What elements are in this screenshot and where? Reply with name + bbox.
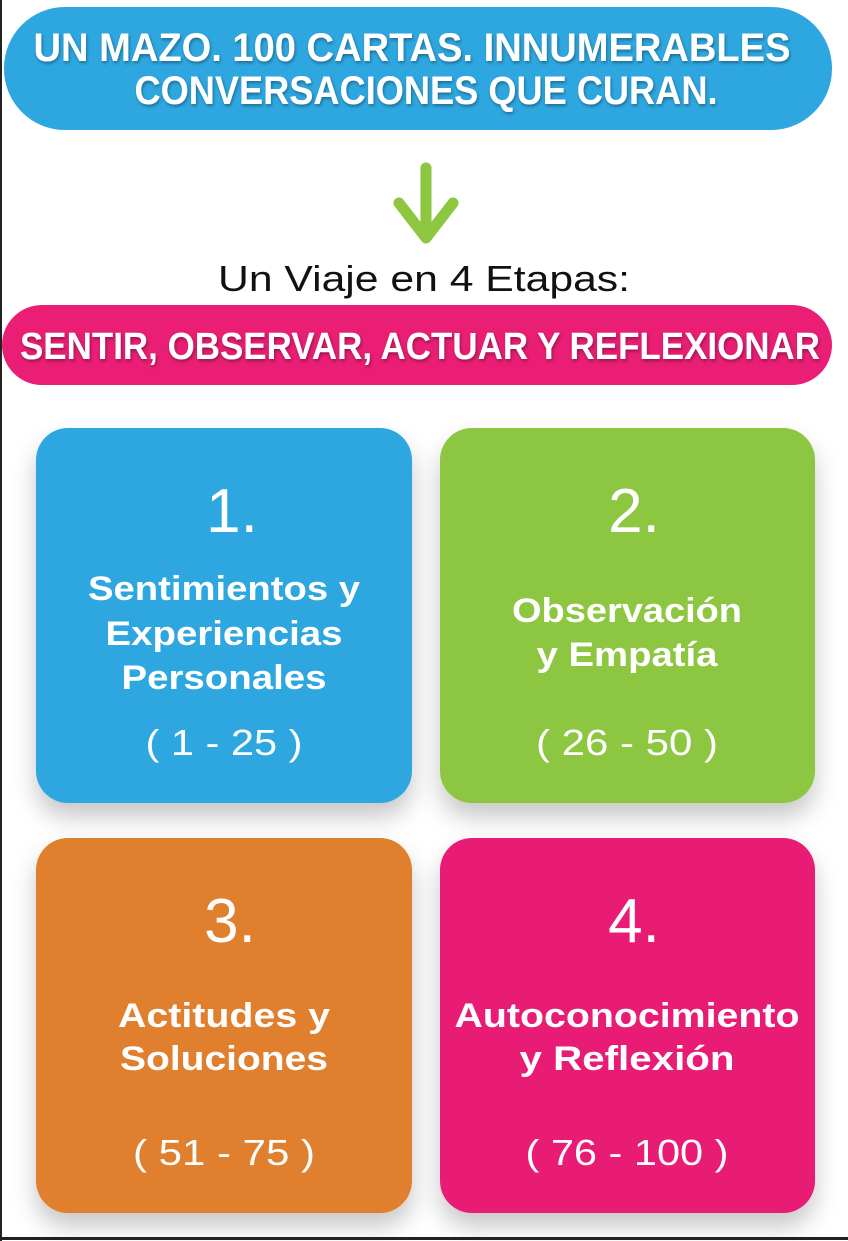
card 4: ( 76 - 100 ) — [526, 1132, 728, 1173]
card 3: 3. — [204, 887, 256, 956]
card 2: 2. — [608, 477, 660, 546]
card 2: ( 26 - 50 ) — [536, 722, 718, 763]
card 3 — [36, 838, 412, 1213]
card 2: Observación — [512, 592, 742, 630]
card 1: 1. — [206, 477, 258, 546]
card 4: 4. — [608, 887, 660, 956]
card 1: ( 1 - 25 ) — [146, 722, 302, 763]
card 3: Soluciones — [120, 1040, 328, 1078]
arrow: down — [399, 168, 453, 238]
card 3: Actitudes y — [118, 997, 330, 1035]
card 2 — [440, 428, 815, 803]
title banner: UN MAZO. 100 CARTAS. INNUMERABLES — [34, 26, 790, 70]
title banner: CONVERSACIONES QUE CURAN. — [134, 69, 718, 113]
card 4 — [440, 838, 815, 1213]
card 1 — [36, 428, 412, 803]
card 1: Sentimientos y — [88, 570, 360, 608]
card 1: Experiencias — [106, 615, 342, 653]
title banner — [4, 7, 832, 130]
stages banner — [2, 305, 832, 385]
card 2: y Empatía — [536, 636, 719, 674]
subtitle: Un Viaje en 4 Etapas: — [218, 258, 630, 299]
card 4: y Reflexión — [520, 1040, 734, 1078]
card 3: ( 51 - 75 ) — [133, 1132, 315, 1173]
card 1: Personales — [122, 659, 326, 697]
card 4: Autoconocimiento — [454, 997, 800, 1035]
